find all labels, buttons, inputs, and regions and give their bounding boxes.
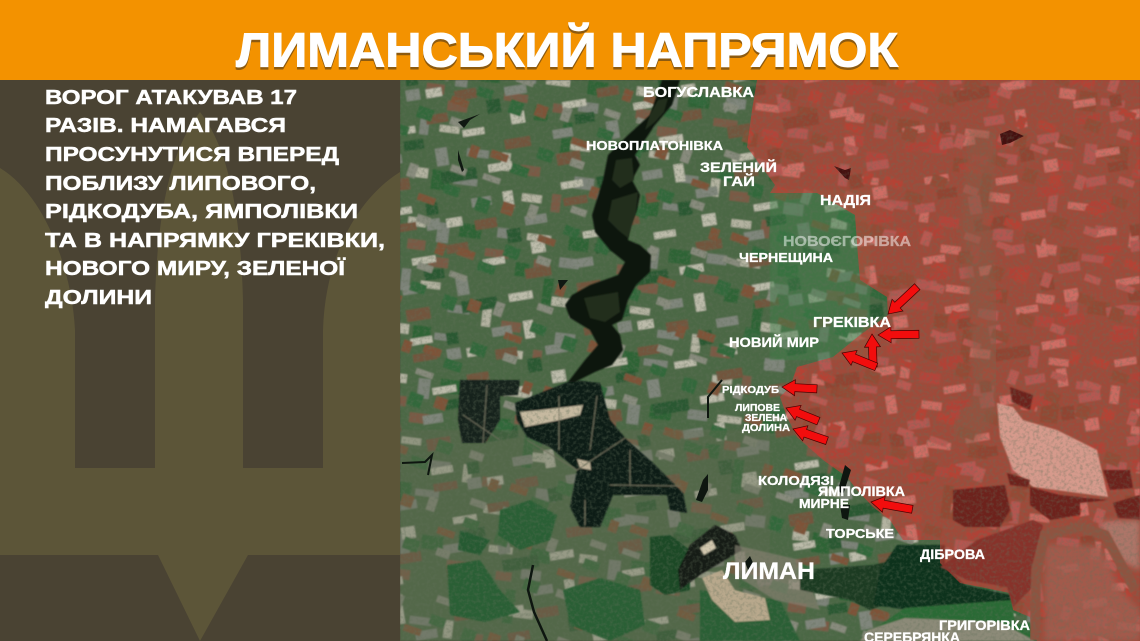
arrow: towards Novyi Myr — [839, 346, 879, 374]
settlement labels: ЯМПОЛІВКА — [818, 483, 905, 499]
pale sand area — [997, 403, 1108, 497]
occupied territory — [747, 80, 1140, 641]
arrow: north to Hrekivka — [864, 334, 881, 367]
text block: attack summary: РАЗІВ. НАМАГАВСЯ — [45, 115, 286, 137]
dark forests — [953, 387, 1140, 527]
arrow: Yampolivka — [870, 494, 914, 517]
satellite map — [400, 80, 1140, 641]
title: ЛИМАНСЬКИЙ НАПРЯМОК — [236, 22, 899, 78]
settlement labels: ДІБРОВА — [920, 546, 985, 562]
header bar — [0, 0, 1140, 80]
settlement labels: ДОЛИНА — [742, 423, 790, 434]
settlement labels: ЛИМАН — [723, 558, 815, 585]
settlement labels — [586, 85, 1030, 641]
text block: attack summary: ВОРОГ АТАКУВАВ 17 — [45, 87, 297, 109]
settlement labels: НОВОПЛАТОНІВКА — [586, 138, 724, 153]
settlement labels: ЛИПОВЕ — [735, 403, 780, 414]
arrow: Lypove — [783, 401, 821, 429]
icon: trident emblem — [0, 112, 400, 641]
occupied town and valley — [960, 130, 990, 440]
settlement labels: ГРИГОРІВКА — [939, 617, 1030, 633]
settlement labels: ГАЙ — [723, 172, 755, 189]
text block: attack summary: НОВОГО МИРУ, ЗЕЛЕНОЇ — [45, 257, 346, 280]
text block: attack summary: ПОБЛИЗУ ЛИПОВОГО, — [45, 173, 316, 195]
forests and sand — [447, 380, 1035, 641]
valley band — [1035, 527, 1135, 640]
settlement labels: ТОРСЬКЕ — [826, 526, 894, 541]
arrow: east of Hrekivka — [878, 326, 919, 343]
farmland fields east — [770, 80, 1140, 641]
pink fields in lower right — [1100, 520, 1140, 570]
reservoir and river — [402, 80, 851, 641]
text block: attack summary — [45, 87, 385, 309]
settlement labels: НОВОЄГОРІВКА — [783, 233, 911, 250]
large occupied forest — [940, 520, 1043, 607]
settlement labels: ЗЕЛЕНИЙ — [700, 158, 777, 175]
farmland fields west — [400, 80, 780, 641]
settlement labels: РІДКОДУБ — [722, 385, 779, 396]
text block: attack summary: ТА В НАПРЯМКУ ГРЕКІВКИ, — [45, 230, 385, 252]
settlement labels: ГРЕКІВКА — [813, 314, 891, 331]
settlement labels: КОЛОДЯЗІ — [758, 473, 834, 488]
title: ЛИМАНСЬКИЙ НАПРЯМОК — [236, 25, 899, 80]
text block: attack summary: ДОЛИНИ — [45, 287, 152, 309]
text block: attack summary: ПРОСУНУТИСЯ ВПЕРЕД — [45, 144, 339, 166]
settlement labels: ЗЕЛЕНА — [745, 413, 787, 424]
arrow: Zelena Dolyna — [790, 421, 830, 448]
settlement labels: ЧЕРНЕЩИНА — [739, 250, 834, 265]
arrow: Ridkodub — [782, 379, 817, 397]
settlement labels: НАДІЯ — [820, 193, 871, 209]
settlement labels: НОВИЙ МИР — [729, 333, 819, 350]
grain texture — [400, 80, 1140, 641]
text block: attack summary: РІДКОДУБА, ЯМПОЛІВКИ — [45, 201, 358, 223]
dark ponds — [834, 130, 1024, 180]
settlement labels: МИРНЕ — [799, 496, 849, 511]
arrow: north-east of Hrekivka — [883, 281, 923, 320]
panel: left text panel with trident — [0, 80, 400, 641]
settlement labels: БОГУСЛАВКА — [643, 85, 755, 101]
attack arrows — [782, 281, 923, 517]
